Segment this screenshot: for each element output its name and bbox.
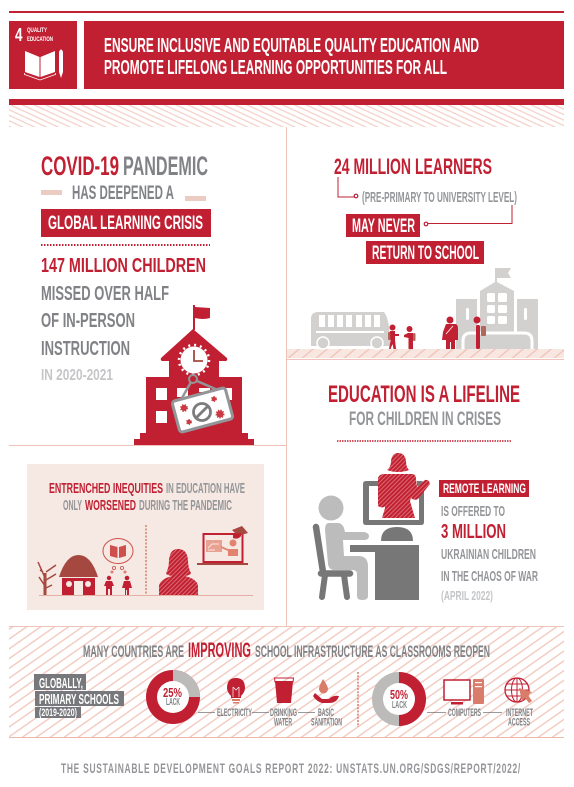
labels: lacking facilities 25: ELECTRICITY (217, 707, 252, 719)
panel: lifeline (316, 381, 538, 603)
labels: lacking facilities 25: BASIC (318, 707, 334, 719)
text: inequities: ENTRENCHED INEQUITIES (49, 480, 163, 497)
highlight: may never: MAY NEVER (352, 216, 415, 237)
hatched band top (9, 105, 564, 127)
labels: lacking facilities 25: DRINKING (270, 707, 297, 719)
donut chart: 50 percent: LACK (392, 700, 407, 711)
text: inequities: ONLY (63, 497, 82, 514)
heading: covid-19 pandemic: COVID-19 (41, 151, 119, 181)
icon: drinking water (274, 678, 294, 703)
heading: covid-19 pandemic: PANDEMIC (123, 151, 208, 181)
icon: school building (456, 268, 538, 349)
labels: lacking facilities 25: WATER (274, 716, 292, 728)
highlight: global learning crisis: GLOBAL LEARNING CRISIS (48, 213, 203, 234)
panel: covid crisis text: OF IN-PERSON (41, 310, 135, 332)
labels: lacking facilities 50 (427, 707, 533, 728)
panel: covid crisis text (41, 151, 211, 384)
labels: lacking facilities 50: COMPUTERS (448, 707, 481, 719)
SDG 4 logo: QUALITY (27, 27, 47, 34)
text: remote learning: (APRIL 2022) (441, 588, 493, 603)
donut chart: 25 percent (146, 670, 200, 724)
icon: children and adults (388, 316, 486, 349)
icon: online teacher screen (197, 526, 248, 565)
panel: covid crisis text: HAS DEEPENED A (72, 183, 174, 204)
SDG 4 logo: 4 (15, 25, 22, 45)
SDG 4 logo (9, 21, 77, 89)
highlight: return to school (366, 241, 484, 264)
icon: tree (38, 562, 56, 595)
panel: school infrastructure (9, 626, 564, 738)
title banner (84, 21, 564, 89)
icon: children thinking of book (103, 538, 133, 595)
arrow: may never connector (424, 205, 512, 226)
panel: 24 million learners (334, 154, 517, 264)
text: remote learning: IS OFFERED TO (441, 503, 505, 520)
heading: improving schools: MANY COUNTRIES ARE (83, 643, 184, 661)
icon: internet access (505, 678, 532, 703)
icon: school bus (311, 312, 390, 349)
donut chart: 50 percent (372, 672, 426, 726)
text: remote learning (439, 480, 538, 603)
panel: covid crisis text: 147 MILLION CHILDREN (41, 255, 206, 277)
donut chart: 25 percent: LACK (166, 697, 180, 708)
text: inequities: WORSENED (85, 497, 136, 514)
icon: remote learning (316, 453, 430, 600)
icon: basic sanitation (313, 679, 339, 703)
panel: covid crisis text: MISSED OVER HALF (41, 283, 169, 305)
icon: computers (444, 679, 484, 704)
text: inequities: DURING THE PANDEMIC (139, 497, 232, 514)
highlight: may never (346, 214, 420, 237)
thick rule (9, 99, 564, 105)
panel: covid crisis text: IN 2020-2021 (41, 367, 113, 384)
icon: house (59, 555, 98, 595)
highlight: return to school: RETURN TO SCHOOL (372, 243, 479, 264)
label: globally primary schools (34, 674, 124, 719)
label: globally primary schools: GLOBALLY, (39, 675, 83, 692)
icon: closed school (134, 305, 254, 445)
panel: school infrastructure: INTERNET (506, 707, 533, 719)
labels: lacking facilities 25 (198, 707, 342, 728)
SDG 4 logo: EDUCATION (27, 36, 53, 43)
text: inequities: IN EDUCATION HAVE (166, 480, 245, 497)
panel: school infrastructure: SANITATION (311, 716, 342, 728)
heading: improving schools: IMPROVING (188, 639, 251, 662)
donut chart: 25 percent: 25% (163, 685, 182, 700)
arrow: learners connector (338, 177, 358, 198)
ground hatch (287, 349, 564, 358)
panel dividers (9, 127, 287, 626)
icon: electricity (227, 678, 245, 704)
text: remote learning: 3 MILLION (441, 521, 506, 543)
highlight: global learning crisis (41, 209, 211, 237)
label: globally primary schools: PRIMARY SCHOOLS (39, 691, 119, 708)
icon: woman watching (159, 549, 198, 595)
text: inequities (49, 480, 245, 514)
donut chart: 50 percent: 50% (390, 687, 408, 702)
panel: inequities (27, 464, 264, 610)
labels: lacking facilities 50: ACCESS (508, 716, 530, 728)
top rule (9, 11, 564, 13)
heading: improving schools (83, 639, 490, 662)
panel: covid crisis text: INSTRUCTION (41, 338, 130, 360)
label: globally primary schools: (2019-2020) (39, 707, 77, 719)
